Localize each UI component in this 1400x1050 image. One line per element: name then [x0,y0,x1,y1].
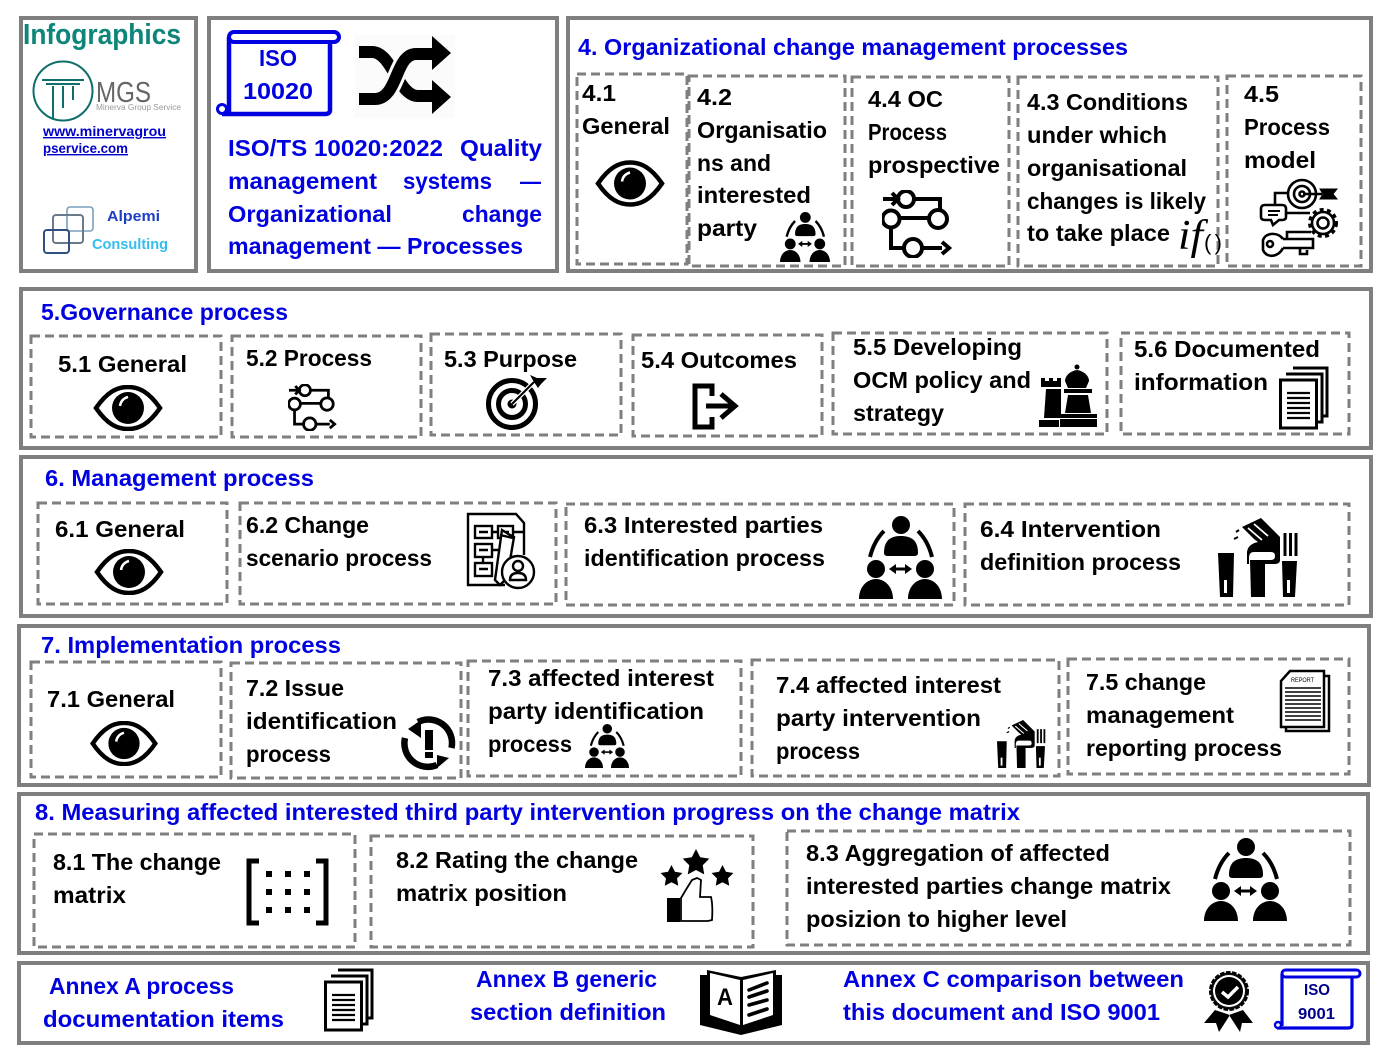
box: 6.4 Intervention: definition process [980,549,1181,575]
box: 6.4 Intervention [965,504,1349,605]
text: document title: — [520,168,541,194]
box: 7.4 Affected party intervention [752,660,1059,776]
panel: section 4 [568,18,1371,271]
text: Annex B: Annex B generic [476,966,657,992]
box: 4.5 Process model [1227,76,1361,266]
box: 4.5 Process model: Process [1244,114,1330,140]
box: 7.2 Issue identification: process [246,741,331,767]
box: 8.1 Change matrix: 8.1 The change [53,849,221,875]
text: document title: change [462,201,542,227]
box: 5.3 Purpose [431,334,621,435]
box: 6.2 Change scenario: 6.2 Change [246,512,369,538]
box: 8.2 Rating: matrix position [396,880,567,906]
text: Annex C: this document and ISO 9001 [843,999,1160,1025]
box: 8.3 Aggregation [787,831,1350,945]
panel: annexes [19,963,1368,1043]
link: website [42,123,166,156]
logo: MGS [34,62,182,120]
icon: open book: A [717,984,733,1011]
logo: Alpemi Consulting [44,207,168,253]
box: 8.2 Rating: 8.2 Rating the change [396,847,638,873]
icon: shuffle arrows [355,35,455,118]
box: 4.4 OC Process: 4.4 OC [868,86,943,112]
box: 5.1 General: 5.1 General [58,351,187,377]
text: Annex A: Annex A process [49,973,234,999]
logo: Alpemi Consulting: Consulting [92,236,168,253]
box: 4.3 Conditions: organisational [1027,155,1187,181]
icon: interested parties [859,516,942,599]
box: 4.2 Organisations: ns and [697,150,771,176]
box: 4.2 Organisations: 4.2 [697,84,732,110]
box: 7.1 General [31,662,221,777]
box: 7.5 Reporting: management [1086,702,1234,728]
link: website: pservice.com [43,140,128,156]
heading: section 8: 8. Measuring affected interested third party intervention progress on the change matrix [35,799,1020,825]
icon: eye [96,387,160,429]
box: 5.5 OCM policy [833,333,1107,434]
box: 4.2 Organisations: Organisatio [697,117,827,143]
heading: section 5: 5.Governance process [41,299,288,325]
icon: eye [93,723,155,764]
panel: section 8 [19,794,1368,953]
box: 5.6 Documented [1121,333,1349,434]
box: 7.2 Issue identification: 7.2 Issue [246,675,344,701]
box: 8.3 Aggregation: 8.3 Aggregation of affected [806,840,1110,866]
box: 4.4 OC Process: prospective [868,152,1000,178]
box: 6.3 Interested parties: 6.3 Interested parties [584,512,823,538]
box: 4.5 Process model: model [1244,147,1316,173]
box: 6.2 Change scenario [240,503,556,604]
box: 6.3 Interested parties [566,504,954,605]
icon: ISO 10020 scroll: ISO [259,45,297,71]
box: 4.5 Process model: 4.5 [1244,81,1279,107]
icon: report document [1281,671,1329,731]
box: 5.2 Process [232,336,421,437]
box: 7.3 Affected party identification [468,661,741,776]
panel: section 5 [21,289,1371,448]
box: 6.3 Interested parties: identification process [584,545,825,571]
box: 6.2 Change scenario: scenario process [246,545,432,571]
icon: process model [1261,180,1337,256]
box: 8.1 Change matrix [34,834,355,947]
box: 4.1 General: 4.1 [582,80,616,106]
box: 4.2 Organisations: interested [697,182,811,208]
icon: target [488,375,547,428]
box: 7.4 Affected party intervention: party intervention [776,705,981,731]
box: 4.4 OC Process: Process [868,119,947,145]
box: 4.2 Organisations: party [697,215,757,241]
text: Annex B: section definition [470,999,666,1025]
panel: branding [21,18,196,271]
icon: documents [326,970,372,1030]
box: 4.1 General [577,74,687,264]
icon: exit arrow [695,386,735,427]
box: 7.4 Affected party intervention: 7.4 affected interest [776,672,1001,698]
icon: ISO 10020 scroll [218,32,339,114]
icon: rosette [1204,972,1253,1032]
icon: chess pieces [1039,364,1097,427]
icon: intervention hands [1218,518,1297,597]
box: 4.2 Organisations [689,76,845,266]
box: 5.2 Process: 5.2 Process [246,345,372,371]
icon: issue cycle [404,720,452,768]
icon: ISO 9001 scroll: 9001 [1298,1006,1335,1023]
box: 5.6 Documented: 5.6 Documented [1134,336,1320,362]
logo: MGS: Minerva Group Service [96,103,182,112]
link: website: www.minervagrou [42,123,166,139]
logo: MGS: MGS [96,77,151,109]
icon: interested parties [780,212,830,262]
box: 5.5 OCM policy: strategy [853,400,944,426]
box: 8.2 Rating [371,836,753,947]
panel: section 6 [21,457,1371,616]
box: 5.1 General [31,336,221,437]
box: 7.2 Issue identification: identification [246,708,397,734]
icon: process flow [882,191,949,257]
box: 6.1 General [38,503,227,604]
heading: section 6: 6. Management process [45,465,314,491]
icon: if function: if [1178,213,1209,259]
icon: process flow [289,385,335,430]
box: 5.4 Outcomes [633,335,822,436]
box: 8.3 Aggregation: posizion to higher level [806,906,1067,932]
text: document title [228,135,542,259]
box: 4.3 Conditions: to take place [1027,220,1170,246]
icon: ISO 10020 scroll: 10020 [243,78,313,104]
box: 8.1 Change matrix: matrix [53,882,126,908]
box: 4.1 General: General [582,113,670,139]
box: 4.3 Conditions: changes is likely [1027,188,1206,214]
box: 7.3 Affected party identification: party identification [488,698,704,724]
heading: section 4: 4. Organizational change management processes [578,34,1128,60]
box: 6.1 General: 6.1 General [55,516,185,542]
box: 5.6 Documented: information [1134,369,1268,395]
box: 7.5 Reporting: reporting process [1086,735,1282,761]
box: 7.4 Affected party intervention: process [776,738,860,764]
box: 6.4 Intervention: 6.4 Intervention [980,516,1161,542]
heading: Infographics: Infographics [23,19,181,51]
box: 7.2 Issue identification [231,663,461,778]
text: document title: management [228,168,377,194]
text: Annex A [43,973,284,1032]
box: 7.5 Reporting [1068,659,1349,774]
text: document title: Organizational [228,201,392,227]
icon: matrix brackets [249,861,326,923]
text: Annex C [843,966,1184,1025]
box: 4.3 Conditions: under which [1027,122,1167,148]
box: 7.3 Affected party identification: 7.3 affected interest [488,665,714,691]
box: 5.4 Outcomes: 5.4 Outcomes [641,347,797,373]
box: 5.5 OCM policy: OCM policy and [853,367,1031,393]
box: 4.4 OC Process [852,77,1009,266]
box: 7.1 General: 7.1 General [47,686,175,712]
box: 7.5 Reporting: 7.5 change [1086,669,1206,695]
text: document title: ISO/TS 10020:2022 [228,135,443,161]
icon: eye [97,551,161,593]
heading: section 7: 7. Implementation process [41,632,341,658]
box: 5.5 OCM policy: 5.5 Developing [853,334,1022,360]
text: Annex C: Annex C comparison between [843,966,1184,992]
text: Annex B [470,966,666,1025]
box: 4.3 Conditions [1018,77,1222,266]
box: 5.3 Purpose: 5.3 Purpose [444,346,577,372]
text: Annex A: documentation items [43,1006,284,1032]
panel: title [209,18,557,271]
text: document title: management — Processes [228,233,523,259]
box: 7.3 Affected party identification: process [488,731,572,757]
panel: section 7 [19,626,1369,785]
icon: stars and thumb [661,849,733,922]
icon: eye [598,162,662,204]
icon: interested parties [1204,838,1287,921]
icon: report document: REPORT [1291,678,1314,684]
box: 8.3 Aggregation: interested parties change matrix [806,873,1171,899]
icon: documents [1280,368,1327,428]
icon: if function [1178,213,1222,259]
icon: if function: () [1204,230,1222,255]
icon: open book [700,970,782,1035]
text: document title: Quality [460,135,542,161]
icon: interested parties [585,724,629,768]
text: document title: systems [403,168,492,194]
icon: scenario document [468,514,534,588]
icon: intervention hands [997,720,1045,768]
box: 4.3 Conditions: 4.3 Conditions [1027,89,1188,115]
icon: ISO 9001 scroll: ISO [1304,982,1330,999]
icon: ISO 9001 scroll [1275,970,1360,1028]
logo: Alpemi Consulting: Alpemi [107,208,160,225]
